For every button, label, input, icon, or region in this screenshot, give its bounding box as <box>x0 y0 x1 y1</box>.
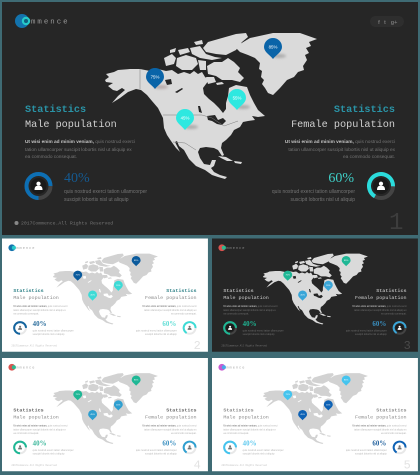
left text block: Male population <box>223 295 269 301</box>
left stat: 40% <box>33 441 47 447</box>
left text block: Statistics <box>13 407 44 413</box>
left text block: ea commodo consequat. <box>25 154 77 160</box>
pin: 75% <box>283 390 292 400</box>
right stat <box>346 321 387 336</box>
logo <box>8 244 35 251</box>
right text block: Statistics <box>376 288 407 294</box>
right text block: Female population <box>355 415 407 421</box>
left stat: suscipit lobortis nisl ut aliquip <box>33 333 65 336</box>
right text block <box>142 288 197 315</box>
left stat: quis nostrud exerci tation ullamcorper <box>33 329 74 332</box>
left text block: Statistics <box>13 288 44 294</box>
slide 5: light, cyan and dark blue <box>212 358 418 472</box>
right text block <box>285 104 396 160</box>
left text block: tation ullamcorper suscipit lobortis nisl ut aliquip ex <box>223 309 277 312</box>
right stat: suscipit lobortis nisl ut aliquip <box>355 333 387 336</box>
right text block: tation ullamcorper suscipit lobortis nisl ut aliquip ex <box>144 309 197 312</box>
left stat: 40%: quis nostrud exerci tation ullamcorper <box>64 189 147 195</box>
logo <box>8 364 35 371</box>
right text block: Female population <box>355 295 407 301</box>
pin: 75%: 75% <box>151 74 159 80</box>
right stat: 60% <box>372 321 386 328</box>
right donut chart <box>365 170 397 202</box>
page number: 3 <box>404 339 411 353</box>
left text block: ea commodo consequat. <box>13 312 39 315</box>
left stat: quis nostrud exerci tation ullamcorper <box>243 449 284 452</box>
pin: 85%: 85% <box>344 380 348 382</box>
left stat: 40%: 40% <box>64 171 90 186</box>
pin: 45%: 45% <box>300 295 305 297</box>
left stat: suscipit lobortis nisl ut aliquip <box>243 333 275 336</box>
pin: 85% <box>132 375 141 386</box>
logo: mmence <box>16 366 35 370</box>
map <box>53 254 158 325</box>
left text block: tation ullamcorper suscipit lobortis nisl ut aliquip ex <box>13 309 67 312</box>
right stat: suscipit lobortis nisl ut aliquip <box>145 333 177 336</box>
left stat: suscipit lobortis nisl ut aliquip <box>33 453 65 456</box>
pin: 85% <box>342 375 351 386</box>
left text block: ea commodo consequat. <box>13 432 39 435</box>
pin: 85%: 85% <box>344 260 348 262</box>
borders <box>140 69 238 150</box>
left text block: Male population <box>223 415 269 421</box>
map <box>263 373 368 444</box>
slide 4: light, green and blue <box>2 358 208 472</box>
left text block: Ut wisi enim ad minim veniam, quis nostrud exerci <box>13 305 68 308</box>
slide 1: dark main slide <box>2 2 418 237</box>
right stat: 60% <box>272 171 355 203</box>
right text block: Female population <box>145 415 197 421</box>
left text block: Ut wisi enim ad minim veniam, quis nostrud exerci <box>223 425 278 428</box>
right stat: 60%: quis nostrud exerci tation ullamcorper <box>272 189 355 195</box>
right text block: tation ullamcorper suscipit lobortis nisl ut aliquip ex <box>144 428 197 431</box>
pin: 75% <box>73 390 82 400</box>
social icons <box>370 16 404 27</box>
left donut <box>224 322 236 334</box>
pin: 55%: 55% <box>233 96 241 100</box>
right text block: Ut wisi enim ad minim veniam, quis nostrud exerci <box>352 425 407 428</box>
logo <box>218 244 245 251</box>
pin: 85%: 85% <box>269 44 277 50</box>
right stat <box>346 441 387 456</box>
left text block: Statistics <box>25 104 86 116</box>
footer: 2017Commence.All Rights Reserved <box>221 464 267 467</box>
pin: 55%: 55% <box>326 285 331 287</box>
right text block <box>352 288 407 315</box>
left stat: quis nostrud exerci tation ullamcorper <box>33 449 74 452</box>
pin: 45%: 45% <box>90 295 95 297</box>
right stat: 60%: suscipit lobortis nisl ut aliquip <box>291 197 355 203</box>
right text block: Ut wisi enim ad minim veniam, quis nostrud exerci <box>352 305 407 308</box>
left text block: Male population <box>13 295 59 301</box>
right text block <box>352 407 407 435</box>
right stat: quis nostrud exerci tation ullamcorper <box>136 449 177 452</box>
logo: mmence <box>226 247 245 251</box>
right stat: 60% <box>162 321 176 328</box>
left text block <box>25 104 135 160</box>
pin: 55% <box>114 400 123 410</box>
pin: 45% <box>298 410 307 420</box>
left text block: Statistics <box>223 288 254 294</box>
pin: 55% <box>324 281 333 291</box>
right text block: Statistics <box>166 407 197 413</box>
pin: 45%: 45% <box>181 116 189 120</box>
logo: mmence <box>226 366 245 370</box>
right donut <box>391 439 408 455</box>
right donut <box>181 320 198 336</box>
left stat: 40% <box>243 321 257 328</box>
right text block: Female population <box>145 295 197 301</box>
right text block: Statistics <box>376 407 407 413</box>
right text block: Statistics <box>166 288 197 294</box>
left text block: ea commodo consequat. <box>223 312 249 315</box>
right text block: ea commodo consequat. <box>381 432 407 435</box>
pin: 45%: 45% <box>90 414 95 416</box>
right text block: ea commodo consequat. <box>381 312 407 315</box>
pin: 45% <box>298 291 307 301</box>
pin: 75% <box>146 68 168 89</box>
slide 2: light, blue and cyan <box>2 238 208 353</box>
page number: 5 <box>404 458 411 472</box>
pin: 85% <box>342 256 351 266</box>
left stat <box>243 321 284 336</box>
right stat: suscipit lobortis nisl ut aliquip <box>355 453 387 456</box>
pin: 85% <box>132 256 141 266</box>
right text block: Ut wisi enim ad minim veniam, quis nostrud exerci <box>142 305 197 308</box>
social icons: g+ <box>391 20 397 26</box>
pin: 55%: 55% <box>326 404 331 406</box>
pin: 45% <box>88 291 97 301</box>
page number: 4 <box>194 458 201 472</box>
pin: 55% <box>228 89 250 110</box>
pin: 55%: 55% <box>116 404 121 406</box>
left donut chart <box>26 174 50 198</box>
left text block: tation ullamcorper suscipit lobortis nisl ut aliquip ex <box>13 428 67 431</box>
pin: 45%: 45% <box>300 414 305 416</box>
pin: 55% <box>324 400 333 410</box>
pin: 75% <box>73 271 82 281</box>
right text block: Female population <box>291 119 395 131</box>
left stat: 40% <box>33 321 47 328</box>
pin: 75% <box>283 271 292 281</box>
right stat: quis nostrud exerci tation ullamcorper <box>346 449 387 452</box>
left text block: Ut wisi enim ad minim veniam, quis nostrud exerci <box>223 305 278 308</box>
left donut <box>14 442 26 453</box>
left text block: ea commodo consequat. <box>223 432 249 435</box>
pin: 75%: 75% <box>76 394 80 396</box>
slide 3: dark, green and blue <box>212 238 418 353</box>
right text block: tation ullamcorper suscipit lobortis nisl ut aliquip ex <box>354 428 407 431</box>
right text block: Ut wisi enim ad minim veniam, quis nostrud exerci <box>142 425 197 428</box>
right stat <box>136 321 177 336</box>
footer: 2017Commence.All Rights Reserved <box>21 220 113 226</box>
right text block: Statistics <box>334 104 395 116</box>
pin: 75%: 75% <box>286 275 290 277</box>
left text block <box>223 407 278 435</box>
left stat <box>33 441 74 456</box>
left text block: Statistics <box>223 407 254 413</box>
footer: 2017Commence.All Rights Reserved <box>11 464 57 467</box>
footer: 2017Commence.All Rights Reserved <box>221 345 267 348</box>
left stat: 40% <box>64 171 147 203</box>
right stat: 60% <box>372 441 386 447</box>
map <box>53 373 158 444</box>
left text block <box>13 288 68 315</box>
left text block: tation ullamcorper suscipit lobortis nisl ut aliquip ex <box>223 428 277 431</box>
social icons: t <box>384 20 386 26</box>
right text block: ea commodo consequat. <box>171 432 197 435</box>
right donut <box>391 320 408 336</box>
left donut <box>224 442 236 453</box>
right donut <box>181 439 198 455</box>
left stat <box>33 321 74 336</box>
page number: 1 <box>389 210 403 237</box>
pin: 75%: 75% <box>286 394 290 396</box>
map of North America <box>105 33 317 179</box>
right text block: ea commodo consequat. <box>171 312 197 315</box>
right text block: tation ullamcorper suscipit lobortis nisl ut aliquip ex <box>354 309 407 312</box>
left stat: 40% <box>243 441 257 447</box>
left text block: Ut wisi enim ad minim veniam, quis nostrud exerci <box>25 139 135 145</box>
left text block <box>13 407 68 435</box>
right stat: suscipit lobortis nisl ut aliquip <box>145 453 177 456</box>
pin: 75%: 75% <box>76 275 80 277</box>
left stat: suscipit lobortis nisl ut aliquip <box>243 453 275 456</box>
page number: 2 <box>194 339 201 353</box>
logo <box>218 364 245 371</box>
logo: mmence <box>16 247 35 251</box>
left text block: Male population <box>13 415 59 421</box>
logo <box>15 14 70 28</box>
social icons: f <box>378 20 380 26</box>
left text block: tation ullamcorper suscipit lobortis nisl ut aliquip ex <box>25 147 132 153</box>
map <box>263 254 368 325</box>
pin: 85%: 85% <box>134 260 138 262</box>
pin: 85%: 85% <box>134 380 138 382</box>
left text block <box>223 288 278 315</box>
right stat: 60% <box>162 441 176 447</box>
pin: 55% <box>114 281 123 291</box>
pin: 55%: 55% <box>116 285 121 287</box>
right stat <box>136 441 177 456</box>
left text block: Ut wisi enim ad minim veniam, quis nostrud exerci <box>13 425 68 428</box>
right text block: ea commodo consequat. <box>343 154 395 160</box>
pin: 45% <box>176 109 198 130</box>
left stat: 40%: suscipit lobortis nisl ut aliquip <box>64 197 129 203</box>
left stat <box>243 441 284 456</box>
right stat: quis nostrud exerci tation ullamcorper <box>346 329 387 332</box>
left stat: quis nostrud exerci tation ullamcorper <box>243 329 284 332</box>
right text block <box>142 407 197 435</box>
right text block: tation ullamcorper suscipit lobortis nisl ut aliquip ex <box>288 147 396 153</box>
left text block: Male population <box>25 119 117 131</box>
right text block: Ut wisi enim ad minim veniam, quis nostrud exerci <box>285 139 395 145</box>
pin: 45% <box>88 410 97 420</box>
right stat: quis nostrud exerci tation ullamcorper <box>136 329 177 332</box>
left donut <box>14 322 26 334</box>
right stat: 60%: 60% <box>328 171 354 186</box>
pin: 85% <box>264 38 286 59</box>
logo: mmence <box>31 18 70 26</box>
footer: 2017Commence.All Rights Reserved <box>11 345 57 348</box>
